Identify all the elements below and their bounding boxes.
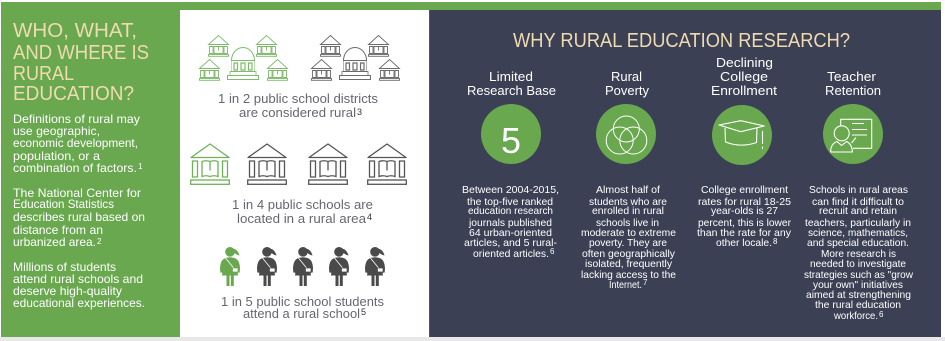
text block — [581, 184, 676, 291]
icon: venn diagram — [596, 104, 656, 164]
text block: definitions: population, or a — [13, 149, 100, 163]
icon: green school districts — [200, 36, 288, 80]
text block: percent, this is lower — [698, 217, 791, 229]
text block: oriented articles. — [473, 248, 549, 260]
text block: moderate to extreme — [581, 227, 676, 239]
text block: rates for rural 18-25 — [698, 196, 791, 208]
column: declining college enrollment — [697, 55, 792, 249]
icon: gray schools — [248, 144, 406, 184]
text block: the rural education — [815, 299, 901, 311]
text block — [462, 184, 559, 260]
panel: statistics — [180, 10, 430, 337]
text block: NCES: The National Center for — [13, 186, 141, 200]
text block: 8 — [773, 237, 778, 246]
stat: public school students: attend a rural school — [243, 306, 360, 321]
column heading — [467, 69, 556, 98]
icon: green school — [191, 144, 229, 184]
text block: schools live in — [596, 217, 659, 229]
text block: NCES: 2 — [97, 237, 102, 246]
text block: lacking access to the — [581, 269, 676, 281]
panel: why rural education research — [430, 10, 941, 337]
column heading: Research Base — [467, 83, 556, 98]
text block: aimed at strengthening — [806, 289, 911, 301]
text block: NCES: describes rural based on — [13, 210, 145, 224]
column: teacher retention — [804, 69, 913, 322]
text block: science, mathematics, — [808, 227, 908, 239]
icon: number five: 5 — [501, 120, 521, 161]
icon: number five — [481, 104, 541, 164]
text block: recruit and retain — [819, 205, 897, 217]
stat: school districts: 3 — [357, 107, 362, 117]
text block: definitions: use geographic, — [13, 124, 100, 138]
stat: school districts: 1 in 2 public school districts — [218, 91, 378, 106]
text block: College enrollment — [701, 184, 788, 196]
stat: school districts: are considered rural — [239, 105, 356, 120]
text block: NCES — [13, 186, 145, 249]
stat: public schools: 4 — [367, 212, 372, 222]
stat: public school students: 5 — [361, 307, 366, 317]
stat: public schools — [232, 197, 373, 226]
text block: definitions: combination of factors. — [13, 161, 137, 175]
text block: More research is — [821, 248, 896, 260]
column heading: Enrollment — [711, 83, 777, 98]
stat: public schools: located in a rural area — [237, 211, 367, 226]
text block: the top-five ranked — [467, 196, 553, 208]
text block: other locale. — [716, 237, 772, 249]
column: rural poverty — [581, 69, 676, 291]
top green bar — [1, 2, 941, 10]
panel: who what where — [1, 2, 180, 337]
text block: can find it difficult to — [812, 196, 904, 208]
text block: millions of students: deserve high-quality — [13, 284, 122, 298]
text block: your own" initiatives — [813, 279, 903, 291]
text block: strategies such as "grow — [804, 269, 913, 281]
column heading: Rural — [611, 69, 642, 84]
text block: isolated, frequently — [585, 258, 673, 270]
column heading: Retention — [825, 83, 881, 98]
heading: who what where: AND WHERE IS — [13, 42, 149, 64]
text block: enrolled in rural — [592, 205, 664, 217]
text block: and special education. — [807, 237, 909, 249]
icon: green student — [220, 247, 240, 286]
text block — [804, 184, 913, 322]
column heading: Limited — [489, 69, 533, 84]
text block: NCES: Education Statistics — [13, 197, 114, 211]
text block: poverty. They are — [589, 237, 667, 249]
heading: who what where: WHO, WHAT, — [13, 20, 137, 42]
text block: definitions — [13, 112, 143, 175]
text block: millions of students: attend rural schools and — [13, 272, 143, 286]
text block: needed to investigate — [810, 258, 906, 270]
column heading: Declining — [716, 55, 773, 70]
text block: definitions: 1 — [138, 162, 143, 171]
text block: NCES: distance from an — [13, 223, 103, 237]
icon: graduation cap — [712, 105, 772, 165]
text block: 6 — [550, 247, 555, 256]
text block — [697, 184, 792, 249]
text block: than the rate for any — [697, 227, 792, 239]
text block: 6 — [879, 310, 884, 319]
background strip — [0, 337, 945, 341]
text block: Internet. — [609, 279, 642, 291]
text block: Schools in rural areas — [809, 184, 908, 196]
text block: Almost half of — [596, 184, 660, 196]
heading: who what where — [13, 20, 149, 105]
text block: articles, and 5 rural- — [464, 237, 557, 249]
text block: 64 urban-oriented — [469, 227, 552, 239]
text block: 7 — [643, 278, 648, 287]
text block: definitions: Definitions of rural may — [13, 112, 140, 126]
text block: education research — [468, 205, 553, 217]
text block: teachers, particularly in — [805, 217, 911, 229]
text block: millions of students: Millions of students — [13, 260, 116, 274]
column heading: College — [720, 69, 768, 84]
text block: millions of students: educational experiences. — [13, 296, 145, 310]
icon: gray students — [257, 247, 385, 286]
text block: often geographically — [582, 248, 676, 260]
text block: Between 2004-2015, — [462, 184, 559, 196]
heading: who what where: EDUCATION? — [13, 83, 134, 105]
text block: journals published — [468, 217, 552, 229]
text block: millions of students — [13, 260, 145, 310]
stat: school districts — [218, 91, 378, 120]
icon: gray school districts — [312, 36, 400, 80]
text block: NCES: urbanized area. — [13, 235, 96, 249]
text block: year-olds is 27 — [711, 205, 778, 217]
icon: teacher at board — [823, 104, 883, 164]
text block: workforce. — [833, 310, 878, 322]
column: limited research base — [462, 69, 559, 260]
column heading — [605, 69, 649, 98]
column heading: Teacher — [827, 69, 877, 84]
stat: public schools: 1 in 4 public schools are — [232, 197, 373, 212]
column heading — [825, 69, 881, 98]
column heading — [711, 55, 777, 98]
column heading: Poverty — [605, 83, 649, 98]
text block: students who are — [589, 196, 667, 208]
text block: definitions: economic development, — [13, 136, 138, 150]
stat: public school students: 1 in 5 public school students — [221, 294, 384, 309]
heading: why rural education research: WHY RURAL EDUCATION RESEARCH? — [513, 30, 850, 52]
stat: public school students — [221, 294, 384, 321]
heading: who what where: RURAL — [13, 63, 74, 85]
